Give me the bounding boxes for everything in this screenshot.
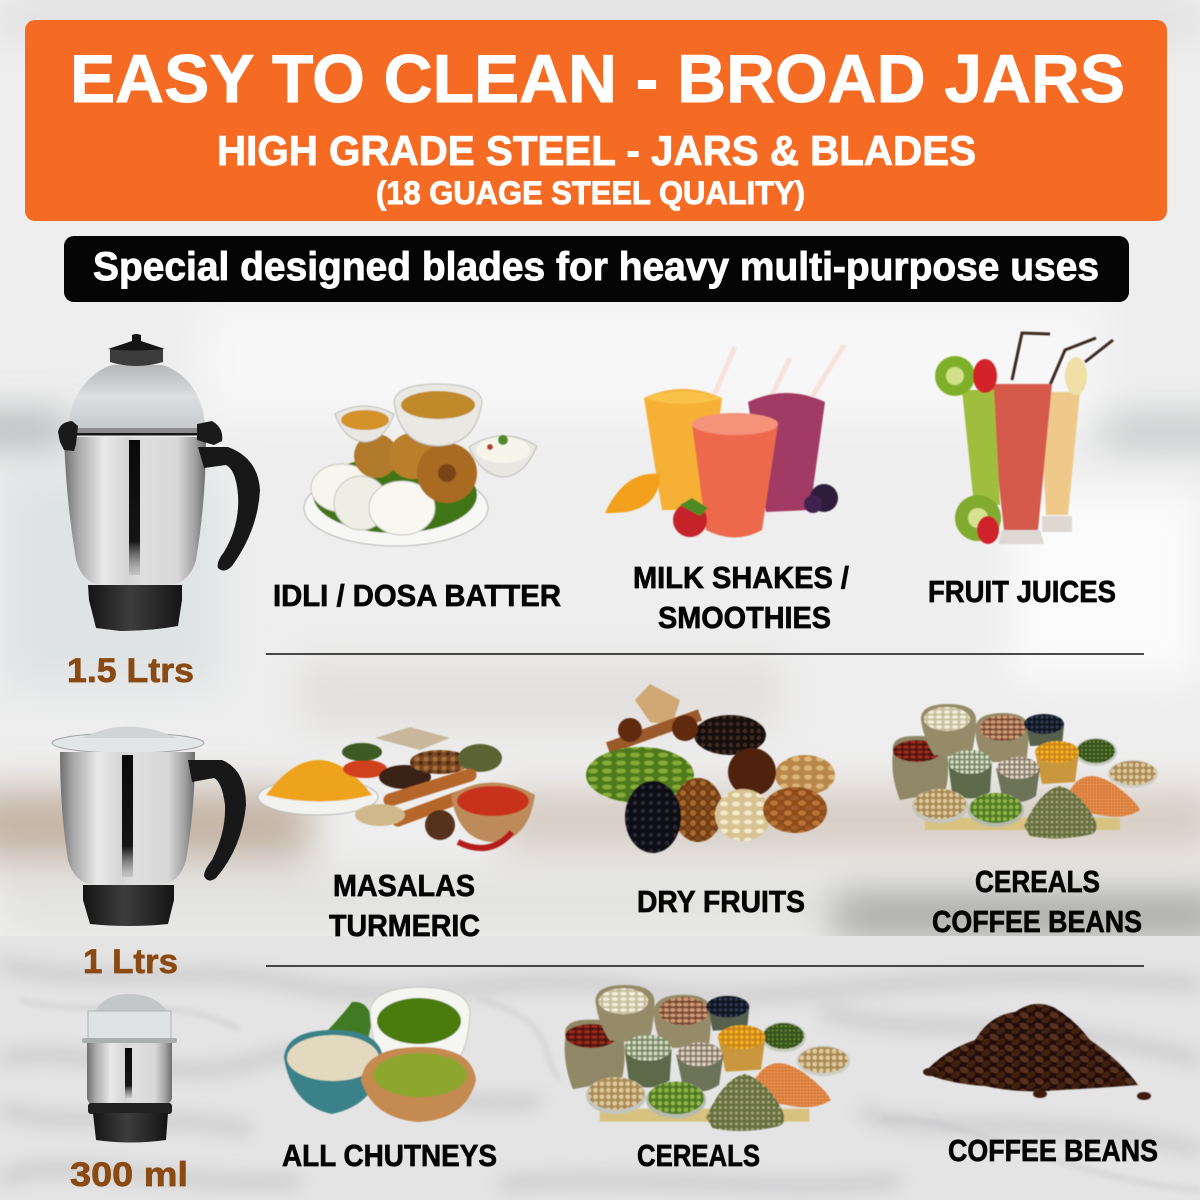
label: masalas turmeric: TURMERIC [329, 908, 480, 943]
jar capacity label 1 Ltrs: 1 Ltrs [83, 943, 178, 981]
label: milk shakes smoothies [633, 560, 849, 635]
food: idli and dosa batter plate [304, 384, 537, 546]
black tagline bar: Special designed blades for heavy multi-purpose uses [93, 245, 1099, 289]
label: all chutneys: ALL CHUTNEYS [282, 1138, 497, 1173]
jar capacity label 300 ml: 300 ml [70, 1156, 188, 1194]
label: masalas turmeric: MASALAS [333, 868, 475, 903]
label: idli dosa batter: IDLI / DOSA BATTER [273, 578, 561, 613]
header banner [25, 20, 1167, 221]
jar: 1.5 litres [58, 334, 260, 631]
label: masalas turmeric [329, 868, 480, 943]
food: cereal sacks [892, 704, 1158, 839]
label: fruit juices: FRUIT JUICES [928, 574, 1116, 609]
food: masalas and turmeric [258, 727, 535, 848]
black tagline bar [64, 236, 1129, 302]
food: fruit juices [935, 333, 1113, 544]
label: dry fruits: DRY FRUITS [637, 884, 805, 919]
food: chutney bowls [284, 987, 476, 1122]
label: cereals coffee beans: COFFEE BEANS [932, 904, 1142, 939]
food: coffee beans pile [923, 1004, 1151, 1100]
food: milk shakes and smoothies [605, 345, 844, 538]
steel quality note: (18 GUAGE STEEL QUALITY) [376, 175, 805, 211]
label: milk shakes smoothies: SMOOTHIES [658, 600, 831, 635]
label: coffee beans: COFFEE BEANS [948, 1133, 1158, 1168]
title: EASY TO CLEAN - BROAD JARS [70, 41, 1125, 117]
background: marble counter [0, 936, 1200, 1200]
jar: 1 litre [52, 726, 246, 926]
jar: 300 ml [82, 994, 177, 1142]
label: cereals coffee beans [932, 864, 1142, 939]
subtitle: HIGH GRADE STEEL - JARS & BLADES [217, 127, 976, 174]
label: cereals: CEREALS [637, 1138, 760, 1173]
jar capacity label 1.5 Ltrs: 1.5 Ltrs [67, 652, 194, 690]
background: blurred kitchen [0, 0, 1200, 940]
label: milk shakes smoothies: MILK SHAKES / [633, 560, 849, 595]
food: cereals in sacks [565, 985, 850, 1131]
label: cereals coffee beans: CEREALS [975, 864, 1100, 899]
food: dry fruits pile [586, 684, 835, 853]
